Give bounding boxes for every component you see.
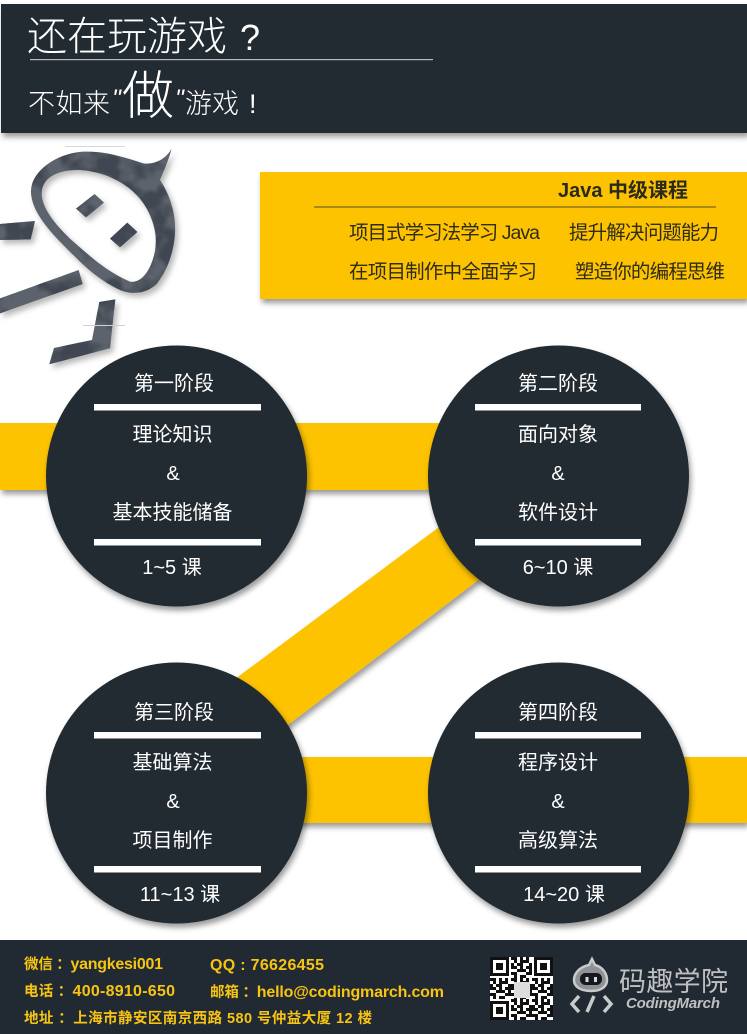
- stage 1 circle: 理论知识: [132, 423, 212, 446]
- stage 2 circle: &: [551, 463, 565, 485]
- logo text: CodingMarch: [626, 995, 720, 1012]
- robot right eye: [110, 223, 137, 247]
- stage 3 circle: [46, 662, 307, 924]
- title line two: !: [249, 89, 257, 119]
- course bullet points: 在项目制作中全面学习: [349, 261, 537, 283]
- logo text: [619, 967, 728, 1012]
- title line two: 游戏: [185, 89, 239, 119]
- robot left eye: [76, 194, 104, 217]
- stage 2 circle: 第二阶段: [518, 372, 598, 395]
- contact details: 微信 ：yangkesi001: [24, 955, 163, 973]
- stage 1 circle: &: [166, 463, 180, 485]
- title line two: 不如来: [28, 89, 110, 119]
- robot lower arm: [0, 270, 83, 313]
- course info panel: [260, 172, 747, 299]
- contact details: [24, 955, 444, 1027]
- title line two: ": [175, 85, 185, 113]
- title line two: 做: [122, 68, 174, 126]
- logo text: 码趣学院: [619, 967, 728, 997]
- contact details: 电话 ：400-8910-650: [24, 983, 175, 1000]
- stage 3 circle: 第三阶段: [134, 701, 214, 724]
- yellow path: first row: [0, 423, 450, 490]
- title line one: 还在玩游戏: [27, 15, 227, 59]
- robot leg: [49, 299, 115, 364]
- footer bar: [0, 940, 747, 1034]
- yellow path: diagonal: [180, 504, 510, 769]
- stage 1 circle: [46, 346, 307, 606]
- title line two: ": [112, 85, 122, 113]
- stage 3 circle: 项目制作: [132, 829, 212, 852]
- stage 3 circle: 11~13 课: [140, 883, 220, 906]
- course bullet points: 提升解决问题能力: [569, 222, 719, 244]
- robot mascot icon: [0, 148, 175, 364]
- logo icon: [572, 959, 611, 1012]
- contact details: 邮箱 ：hello@codingmarch.com: [210, 983, 444, 1001]
- stage 1 circle: 基本技能储备: [112, 501, 232, 524]
- course bullet points: [349, 222, 725, 283]
- title line two: [28, 68, 257, 126]
- stage 4 circle: 程序设计: [518, 751, 598, 774]
- contact details: 地址 ：上海市静安区南京西路 580 号仲益大厦 12 楼: [24, 1009, 372, 1027]
- stage 2 circle: 软件设计: [518, 501, 598, 524]
- stage 1 circle: 第一阶段: [134, 372, 214, 395]
- stage 4 circle: 第四阶段: [518, 701, 598, 724]
- stage 4 circle: 高级算法: [518, 829, 598, 852]
- title line one: ?: [240, 17, 260, 58]
- stage 4 circle: &: [551, 791, 565, 813]
- stage 3 circle: 基础算法: [132, 751, 212, 774]
- yellow path: second row: [290, 757, 747, 823]
- course bullet points: 项目式学习法学习 Java: [349, 222, 540, 244]
- stage 4 circle: [428, 662, 689, 924]
- course title: Java 中级课程: [558, 179, 688, 202]
- contact details: QQ : 76626455: [210, 957, 324, 974]
- stage 1 circle: 1~5 课: [142, 556, 202, 579]
- stage 2 circle: 6~10 课: [523, 556, 593, 579]
- stage 3 circle: &: [166, 791, 180, 813]
- QR code: [490, 957, 553, 1020]
- header banner: [1, 4, 747, 133]
- course bullet points: 塑造你的编程思维: [575, 261, 725, 283]
- stage 2 circle: 面向对象: [518, 423, 598, 446]
- robot upper arm: [0, 221, 35, 240]
- stage 2 circle: [428, 346, 689, 606]
- stage 4 circle: 14~20 课: [523, 883, 605, 906]
